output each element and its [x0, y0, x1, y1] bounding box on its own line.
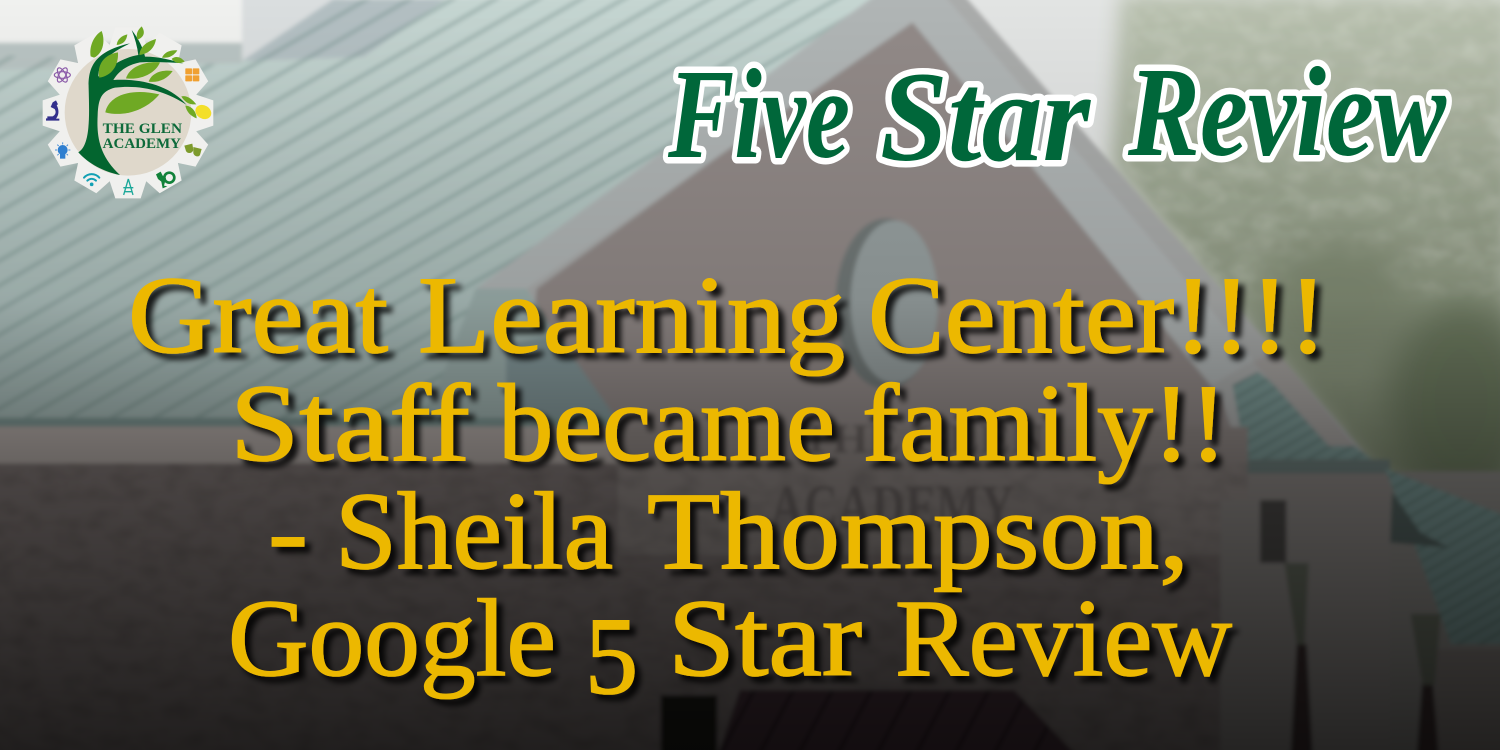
gear teeth — [43, 28, 213, 198]
logo wordmark: THE GLEN — [103, 121, 182, 137]
palm trees — [1284, 563, 1441, 750]
leaves — [90, 26, 197, 118]
round gable window — [835, 219, 937, 389]
building sign lettering: THE GLEN — [801, 416, 1045, 463]
quote line 1: Center!!!! — [868, 254, 1327, 376]
quote line 3: - — [268, 470, 308, 592]
icon: light bulb — [55, 142, 70, 159]
quote line 3: Thompson, — [647, 470, 1189, 592]
heading: Five Star Review: Five — [667, 43, 850, 185]
review quote text — [128, 254, 1327, 717]
building sign lettering: ACADEMY — [770, 471, 1014, 541]
building sign lettering — [770, 416, 1045, 541]
quote line 4: Google — [228, 577, 556, 699]
heading: Five Star Review — [667, 41, 1447, 188]
heading: Five Star Review: Review — [1127, 41, 1447, 183]
icon: theatre masks — [184, 144, 202, 156]
icon: wrench and gear — [156, 172, 174, 188]
icon: wifi — [84, 174, 99, 185]
quote line 4: 5 — [585, 595, 638, 717]
quote line 1: Great — [128, 254, 388, 376]
quote line 4: Review — [895, 577, 1232, 699]
quote line 2: became — [498, 362, 835, 484]
quote line 2: family!! — [862, 362, 1227, 484]
logo wordmark: ACADEMY — [103, 136, 181, 152]
icon: atom — [54, 66, 70, 84]
quote line 1: Learning — [418, 254, 845, 376]
icon: lemon — [193, 102, 214, 122]
quote line 2: Staff — [230, 362, 470, 484]
quote line 4: Star — [668, 577, 862, 699]
icon: calculator grid — [185, 68, 199, 81]
logo: The Glen Academy gear badge — [43, 26, 214, 198]
icon: compass — [123, 179, 133, 195]
entrance awning — [717, 690, 1077, 750]
icon: microscope — [46, 100, 59, 121]
beige disc — [65, 49, 191, 176]
quote line 3: Sheila — [335, 470, 613, 592]
heading: Five Star Review: Star — [880, 46, 1091, 188]
tree trunk and branches — [78, 30, 187, 175]
